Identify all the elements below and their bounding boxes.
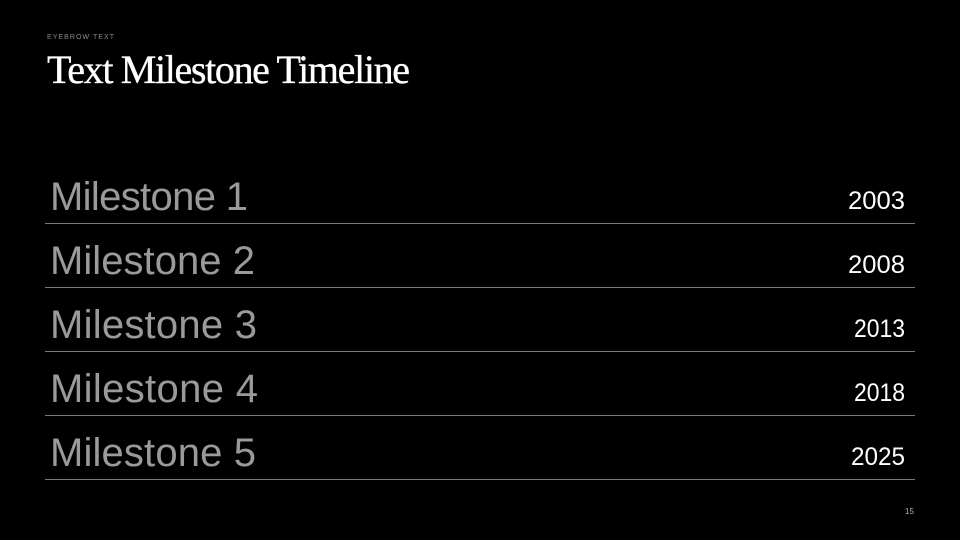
row: milestone 2, 2008 — [45, 239, 915, 288]
row: milestone 5, 2025: Milestone 5 — [50, 431, 256, 475]
row: milestone 4, 2018 — [45, 367, 915, 416]
row: milestone 3, 2013: Milestone 3 — [50, 303, 257, 347]
row: milestone 2, 2008: Milestone 2 — [50, 239, 255, 283]
row: milestone 3, 2013 — [45, 303, 915, 352]
row: milestone 5, 2025: 2025 — [851, 443, 905, 471]
page number: 15 — [905, 507, 914, 516]
milestone timeline list — [45, 175, 915, 480]
row: milestone 1, 2003 — [45, 175, 915, 224]
row: milestone 2, 2008: 2008 — [848, 251, 905, 279]
row: milestone 3, 2013: 2013 — [854, 315, 905, 343]
row: milestone 5, 2025 — [45, 431, 915, 480]
row: milestone 4, 2018: Milestone 4 — [50, 367, 258, 411]
row: milestone 4, 2018: 2018 — [854, 379, 905, 407]
row: milestone 1, 2003: Milestone 1 — [50, 175, 248, 219]
title: Text Milestone Timeline — [47, 47, 410, 92]
row: milestone 1, 2003: 2003 — [848, 187, 905, 215]
eyebrow text: EYEBROW TEXT — [47, 34, 115, 41]
